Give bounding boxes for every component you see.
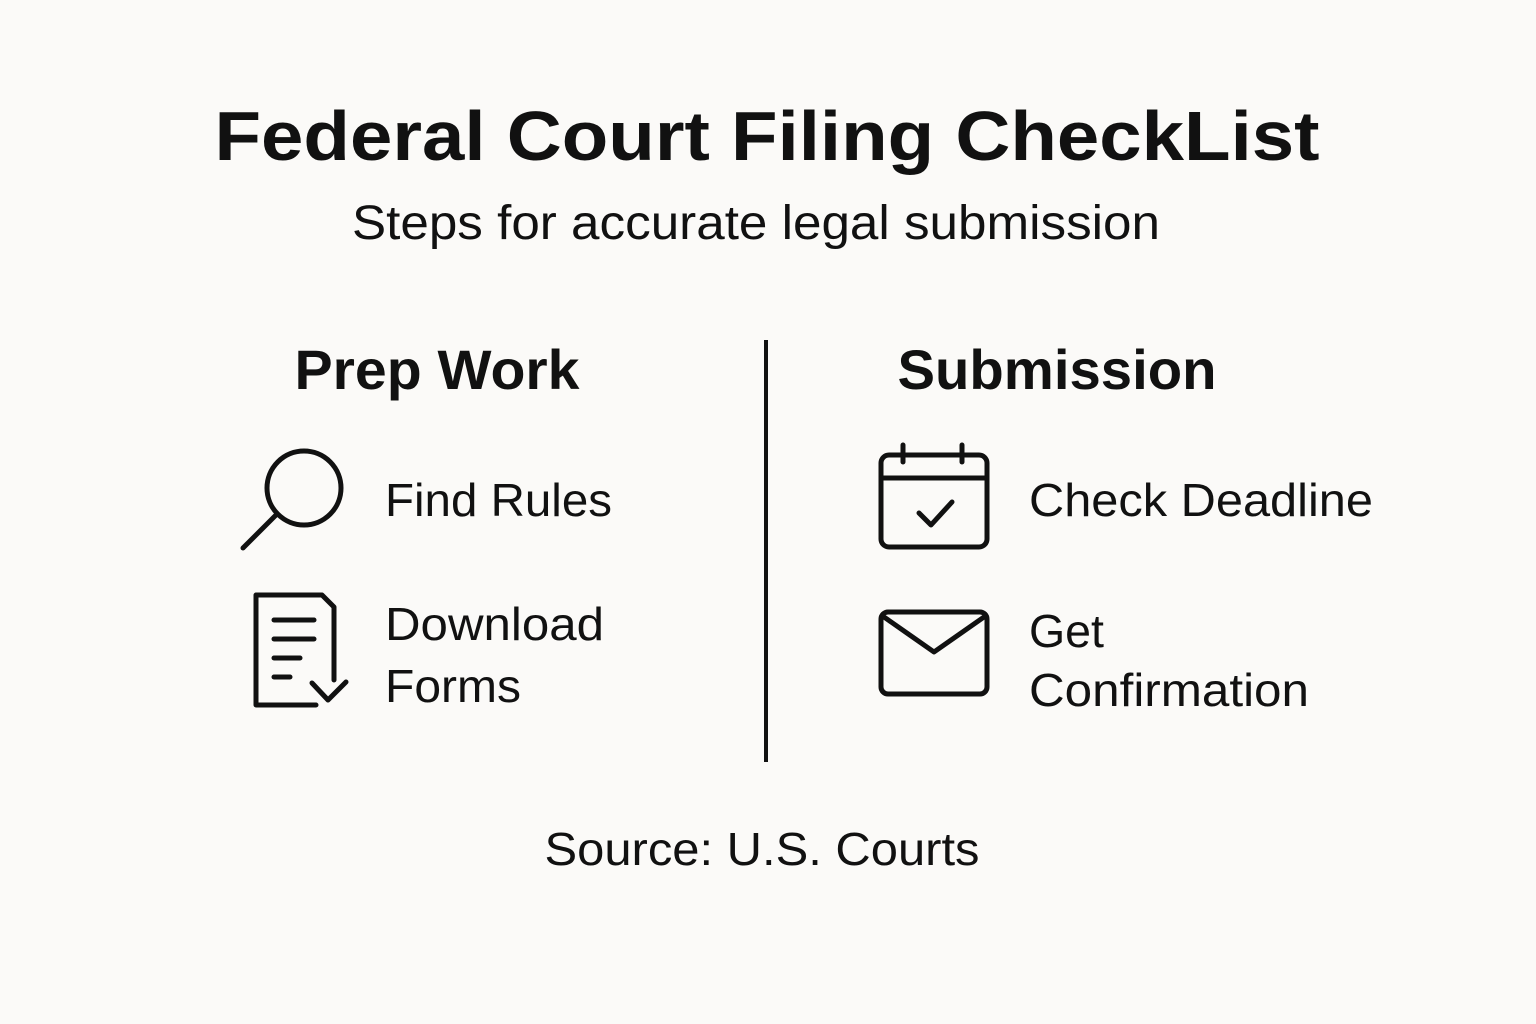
title: Federal Court Filing CheckList: [214, 97, 1320, 175]
heading: submission: Submission: [898, 338, 1216, 401]
subtitle: Steps for accurate legal submission: [352, 197, 1160, 250]
text: get confirmation: [1029, 605, 1309, 716]
icon: magnifier: [243, 451, 341, 548]
heading: prep work: Prep Work: [294, 338, 580, 401]
icon: envelope: [881, 612, 987, 694]
text: download forms: [385, 598, 604, 712]
text: download forms: Download: [385, 598, 604, 650]
text: find rules: Find Rules: [385, 474, 612, 526]
source: Source: U.S. Courts: [544, 823, 980, 875]
text: get confirmation: Confirmation: [1029, 664, 1309, 716]
text: get confirmation: Get: [1029, 605, 1104, 657]
divider: [764, 340, 768, 762]
text: download forms: Forms: [385, 660, 521, 712]
icon: calendar: [881, 445, 987, 547]
icon: document download: [256, 595, 346, 705]
text: check deadline: Check Deadline: [1029, 474, 1373, 526]
